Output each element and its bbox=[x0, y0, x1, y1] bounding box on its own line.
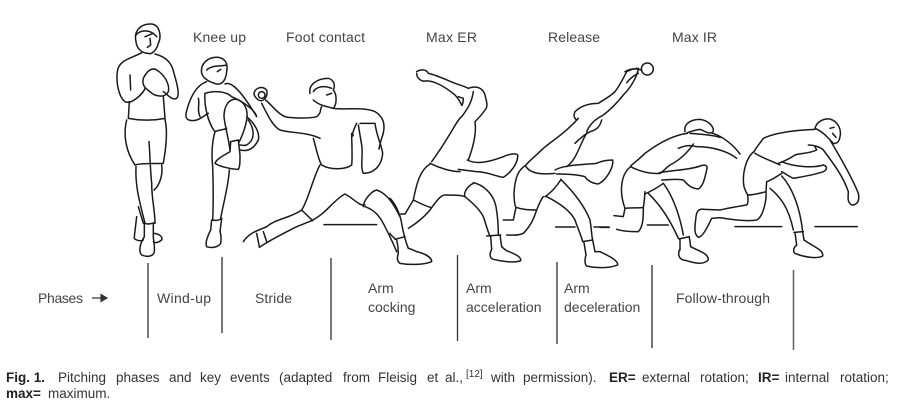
key event labels bbox=[193, 29, 717, 45]
arrow: phases bbox=[92, 294, 107, 302]
phases row label: Phases bbox=[38, 290, 83, 306]
caption: al., bbox=[445, 370, 463, 385]
phase: arm cocking: Arm bbox=[368, 280, 394, 296]
caption: Pitching bbox=[58, 370, 106, 385]
phase: arm deceleration: Arm bbox=[564, 280, 590, 296]
caption: maximum. bbox=[48, 386, 110, 401]
caption: external bbox=[642, 370, 690, 385]
caption: permission). bbox=[523, 370, 597, 385]
figure: foot contact pitcher bbox=[243, 78, 400, 252]
label: max ER: Max ER bbox=[426, 29, 477, 45]
figure: max ER pitcher bbox=[401, 70, 521, 262]
caption: [12] bbox=[466, 369, 483, 380]
label: foot contact: Foot contact bbox=[286, 29, 365, 45]
caption: Fig. 1. bbox=[6, 370, 45, 385]
figure: max IR pitcher bbox=[600, 63, 740, 263]
phase: wind-up: Wind-up bbox=[157, 290, 211, 306]
label: knee up: Knee up bbox=[193, 29, 246, 45]
phase: arm acceleration: acceleration bbox=[466, 299, 542, 315]
caption: with bbox=[490, 370, 515, 385]
phase: arm cocking: cocking bbox=[368, 299, 415, 315]
phase: follow-through: Follow-through bbox=[676, 290, 770, 306]
caption: internal bbox=[785, 370, 829, 385]
caption: (adapted bbox=[279, 370, 332, 385]
phase: arm acceleration: Arm bbox=[466, 280, 492, 296]
figure: foot contact front shoe bbox=[390, 198, 432, 264]
label: release: Release bbox=[548, 29, 600, 45]
phase: stride: Stride bbox=[255, 290, 292, 306]
figure: follow-through pitcher bbox=[695, 119, 859, 258]
caption: Fleisig bbox=[378, 370, 417, 385]
caption: ER= bbox=[609, 370, 636, 385]
caption: et bbox=[427, 370, 439, 385]
caption: rotation; bbox=[700, 370, 749, 385]
caption: rotation; bbox=[840, 370, 889, 385]
phase divider lines bbox=[148, 255, 794, 350]
phase: arm deceleration: deceleration bbox=[564, 299, 640, 315]
caption: max= bbox=[6, 386, 41, 401]
caption: IR= bbox=[758, 370, 780, 385]
caption: and bbox=[169, 370, 192, 385]
caption: events bbox=[230, 370, 270, 385]
figure: release pitcher bbox=[503, 68, 638, 268]
caption: phases bbox=[116, 370, 160, 385]
caption: key bbox=[200, 370, 221, 385]
figure: knee up pitcher bbox=[186, 57, 259, 247]
figure: wind-up pitcher bbox=[117, 24, 178, 256]
label: max IR: Max IR bbox=[672, 29, 717, 45]
caption: from bbox=[343, 370, 370, 385]
